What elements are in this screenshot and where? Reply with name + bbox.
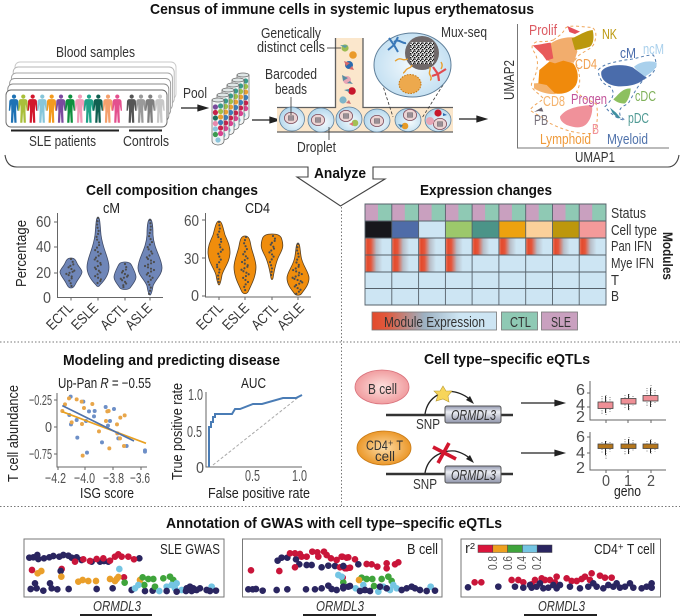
arrowhead bbox=[466, 396, 474, 404]
legend: CTL bbox=[502, 312, 538, 331]
y tick labels: 0 bbox=[43, 290, 51, 307]
label: controls: Controls bbox=[123, 134, 169, 150]
x axis label: False positive rate bbox=[208, 486, 310, 502]
label: genetically distinct cells: distinct cells bbox=[257, 40, 325, 56]
tick labels: 0.5 bbox=[245, 468, 260, 485]
label: droplet: Droplet bbox=[297, 140, 336, 156]
x labels: ACTL bbox=[98, 301, 131, 334]
panel label: SLE GWAS bbox=[160, 542, 220, 558]
status row bbox=[365, 204, 606, 221]
whiskers bbox=[606, 439, 650, 455]
label: analyze: Analyze bbox=[314, 165, 366, 182]
y tick labels bbox=[29, 393, 52, 463]
legend: SLE bbox=[542, 312, 578, 331]
jitter bbox=[602, 385, 655, 415]
variant dots bbox=[468, 573, 652, 588]
label: genetically distinct cells bbox=[257, 26, 341, 56]
violin chart: cM bbox=[36, 201, 163, 334]
scale labels: 0.4 bbox=[514, 556, 529, 570]
channel walls bbox=[277, 38, 453, 132]
chart title: CD4 bbox=[245, 201, 270, 217]
scale labels: 0.6 bbox=[500, 556, 515, 570]
UMAP labels: Lymphoid bbox=[540, 132, 591, 148]
y tick labels: 20 bbox=[36, 265, 51, 282]
axes bbox=[587, 432, 666, 473]
x labels: ESLE bbox=[69, 300, 102, 334]
base fill bbox=[365, 204, 606, 305]
data points bbox=[216, 222, 303, 294]
box plot: B cell bbox=[576, 381, 666, 426]
UMAP axes bbox=[518, 24, 669, 148]
label: barcoded beads: beads bbox=[275, 82, 307, 98]
panel: blood samples bbox=[6, 45, 176, 150]
row labels bbox=[611, 206, 657, 305]
UMAP2 axis label: UMAP2 bbox=[502, 60, 518, 100]
boxes bbox=[598, 396, 658, 408]
row labels: B bbox=[611, 289, 619, 305]
panel: pooling bbox=[181, 73, 279, 145]
zoom dashed lines bbox=[382, 83, 443, 118]
x labels: ECTL bbox=[44, 301, 77, 334]
y tick labels: 60 bbox=[36, 214, 51, 231]
y tick labels: 40 bbox=[36, 239, 51, 256]
y tick labels: −0.25 bbox=[29, 393, 52, 409]
bracket: SLE patients bbox=[11, 130, 119, 132]
DNA line bbox=[386, 414, 513, 416]
genotype tick labels: 1 bbox=[624, 473, 632, 490]
ROC curve bbox=[209, 395, 302, 467]
x labels bbox=[194, 300, 308, 334]
tick labels: 1.0 bbox=[188, 387, 203, 404]
heading: Cell type–specific eQTLs bbox=[424, 351, 590, 368]
arrow: to droplets bbox=[252, 117, 279, 123]
diagonal reference bbox=[213, 396, 300, 465]
panel label: B cell bbox=[407, 542, 438, 558]
legend: SLE: SLE bbox=[551, 315, 571, 331]
pooled tubes bbox=[212, 73, 249, 145]
bracket: controls bbox=[129, 130, 162, 132]
grid lines bbox=[365, 204, 606, 305]
heading: Cell composition changes bbox=[86, 182, 258, 199]
scale labels: 0.8 bbox=[485, 556, 500, 570]
x tick labels: −4.0 bbox=[74, 471, 95, 487]
tick labels: 6 bbox=[576, 382, 585, 399]
x labels: ASLE bbox=[123, 300, 156, 334]
panel: expression changes bbox=[365, 182, 675, 331]
label: pool: Pool bbox=[183, 86, 207, 102]
tick labels: 0 bbox=[196, 460, 204, 477]
boxes bbox=[598, 444, 658, 448]
main title: Census of immune cells in systemic lupus erythematosus bbox=[150, 1, 534, 18]
red cross bbox=[433, 443, 456, 463]
panel: microfluidic droplets bbox=[257, 25, 487, 156]
heatmap bbox=[365, 204, 606, 305]
chart title: cM bbox=[103, 201, 120, 217]
CD4 T cell label: CD4⁺ T bbox=[366, 437, 403, 453]
UMAP labels: Myeloid bbox=[607, 132, 648, 148]
frame bbox=[242, 539, 442, 597]
cell type row bbox=[365, 221, 606, 238]
antibody: blue bbox=[388, 37, 406, 52]
tick labels: 2 bbox=[576, 409, 585, 426]
regulation arc bbox=[425, 451, 472, 473]
axes bbox=[587, 381, 666, 423]
CD4 T cell oval bbox=[357, 431, 411, 465]
violins bbox=[60, 217, 162, 295]
x labels: ASLE bbox=[275, 300, 308, 334]
panel: modeling and predicting disease bbox=[6, 352, 310, 502]
data points bbox=[66, 218, 154, 294]
y tick labels: 0 bbox=[191, 288, 199, 305]
frame bbox=[24, 539, 224, 597]
tick labels: 6 bbox=[576, 429, 585, 446]
gene bar bbox=[80, 614, 152, 616]
locus plot: B cell bbox=[242, 539, 442, 616]
x tick labels: −3.6 bbox=[130, 471, 150, 487]
label: genetically distinct cells: Genetically bbox=[261, 26, 322, 42]
row labels: Cell type bbox=[611, 223, 657, 239]
modules axis label: Modules bbox=[660, 232, 675, 280]
axes bbox=[54, 393, 147, 470]
analyze bracket and arrow bbox=[5, 155, 679, 206]
tick labels bbox=[576, 382, 585, 426]
CD4 T cell label bbox=[366, 437, 403, 464]
ORMDL3 gene bbox=[445, 466, 501, 484]
genotype tick labels bbox=[602, 473, 655, 490]
gene label: ORMDL3 bbox=[538, 599, 585, 615]
SNP label: SNP bbox=[416, 417, 440, 433]
tick labels: 4 bbox=[576, 445, 585, 462]
tick labels: 0.5 bbox=[187, 424, 202, 441]
whiskers bbox=[606, 388, 650, 413]
CD4 T cell label: cell bbox=[375, 448, 395, 464]
x tick labels: −3.8 bbox=[103, 471, 124, 487]
panel label: CD4⁺ T cell bbox=[594, 542, 655, 558]
ROC curve chart bbox=[170, 376, 310, 502]
points and trend lines bbox=[62, 397, 146, 456]
UMAP clusters bbox=[530, 26, 657, 134]
colour scale bbox=[478, 545, 552, 552]
y tick labels: 30 bbox=[184, 251, 199, 268]
regulation arc bbox=[425, 392, 472, 414]
r squared legend bbox=[465, 541, 552, 570]
scatter title: Up-Pan R = −0.55 bbox=[58, 376, 151, 392]
label: barcoded beads: Barcoded bbox=[265, 67, 317, 83]
x tick labels bbox=[45, 471, 150, 487]
panel: cell composition changes bbox=[14, 182, 311, 334]
y axis label: T cell abundance bbox=[6, 385, 22, 482]
label: mux-seq: Mux-seq bbox=[441, 25, 487, 41]
variant dots, right half bbox=[342, 557, 435, 592]
UMAP labels: CD4 bbox=[575, 57, 597, 73]
legend: module expression: Module Expression bbox=[384, 315, 485, 331]
Mye IFN row bbox=[365, 255, 472, 272]
panel: UMAP bbox=[502, 23, 669, 166]
orange cell bbox=[399, 74, 421, 94]
people: controls bbox=[126, 94, 165, 123]
star bbox=[434, 386, 452, 402]
droplets bbox=[280, 107, 451, 132]
SNP label: SNP bbox=[413, 477, 437, 493]
jitter bbox=[602, 437, 655, 460]
heading: Expression changes bbox=[420, 182, 552, 199]
ORMDL3 gene: ORMDL3 bbox=[451, 468, 496, 484]
y tick labels bbox=[36, 214, 51, 307]
UMAP labels: CD8 bbox=[543, 94, 565, 110]
B cell label: B cell bbox=[368, 382, 397, 398]
barcoded bead with QR pattern bbox=[405, 36, 439, 70]
frame bbox=[461, 539, 660, 597]
arrow: CD4 result bbox=[521, 450, 564, 456]
UMAP labels: cDC bbox=[635, 89, 656, 105]
ORMDL3 gene: ORMDL3 bbox=[451, 408, 496, 424]
arrowhead bbox=[466, 455, 474, 463]
barcoded beads in droplets bbox=[284, 109, 447, 130]
y tick labels: −0.75 bbox=[29, 447, 52, 463]
channel fill bbox=[277, 38, 453, 132]
antibody: red bbox=[432, 67, 446, 81]
gene label: ORMDL3 bbox=[316, 599, 364, 615]
oligo tags bbox=[395, 59, 442, 80]
arrow: to tubes bbox=[181, 105, 207, 111]
row labels: T bbox=[611, 273, 619, 289]
panel: cell type-specific eQTLs bbox=[355, 351, 666, 500]
Pan IFN row bbox=[365, 238, 606, 255]
UMAP labels: pDC bbox=[628, 111, 649, 127]
mux-seq magnified cell bbox=[374, 33, 451, 118]
arrow: to UMAP bbox=[459, 116, 486, 122]
x axis label: ISG score bbox=[80, 486, 134, 502]
y tick labels: 60 bbox=[184, 213, 199, 230]
UMAP labels: NK bbox=[602, 27, 617, 43]
variant dots bbox=[29, 554, 216, 592]
CD4 T cell diagram bbox=[357, 431, 513, 493]
tick labels bbox=[576, 429, 585, 477]
label: barcoded beads bbox=[265, 67, 317, 115]
stacked sample cards bbox=[6, 62, 176, 127]
row labels: Status bbox=[611, 206, 646, 222]
genotype tick labels: 0 bbox=[602, 473, 610, 490]
label: droplet bbox=[297, 127, 336, 156]
axes bbox=[202, 213, 311, 300]
label: blood samples: Blood samples bbox=[56, 45, 135, 61]
x labels: ESLE bbox=[220, 300, 253, 334]
violins bbox=[208, 221, 309, 295]
UMAP labels: Progen bbox=[571, 92, 607, 108]
axes bbox=[54, 213, 163, 300]
axes bbox=[206, 392, 302, 467]
y tick labels bbox=[184, 213, 199, 305]
UMAP labels: cM bbox=[620, 46, 636, 62]
section dividers bbox=[0, 207, 680, 506]
legend: CTL: CTL bbox=[510, 315, 531, 331]
B cell oval bbox=[355, 370, 409, 404]
y axis label: Percentage bbox=[14, 220, 30, 287]
row labels: Pan IFN bbox=[611, 239, 652, 255]
gene bar bbox=[524, 614, 597, 616]
gene label: ORMDL3 bbox=[93, 599, 141, 615]
panel: annotation of GWAS bbox=[24, 515, 660, 616]
variant dots, left half bbox=[248, 552, 348, 591]
cells in channel and droplets bbox=[339, 44, 447, 129]
scatter plot bbox=[6, 376, 151, 502]
geno axis label: geno bbox=[614, 484, 641, 500]
heading: Annotation of GWAS with cell type–specific eQTLs bbox=[166, 515, 502, 532]
locus plot: SLE GWAS bbox=[24, 539, 224, 616]
UMAP labels: B bbox=[592, 122, 599, 138]
locus plot: CD4 T cell bbox=[461, 539, 660, 616]
y axis label: True positive rate bbox=[170, 383, 186, 480]
tick labels: 2 bbox=[576, 460, 585, 477]
tick labels: 1.0 bbox=[292, 468, 307, 485]
row labels: Mye IFN bbox=[611, 256, 654, 272]
r squared label: r² bbox=[465, 541, 475, 557]
box plot: CD4 T cell bbox=[576, 429, 666, 500]
UMAP labels: ncM bbox=[643, 42, 664, 58]
B cell diagram bbox=[355, 370, 513, 433]
y tick labels: 0 bbox=[45, 420, 52, 436]
UMAP labels: PB bbox=[534, 113, 548, 129]
x labels: ACTL bbox=[249, 301, 282, 334]
heading: Modeling and predicting disease bbox=[63, 352, 280, 369]
UMAP1 axis label: UMAP1 bbox=[575, 150, 615, 166]
x tick labels: −4.2 bbox=[45, 471, 66, 487]
scale labels bbox=[485, 556, 544, 570]
arrow: B cell result bbox=[521, 400, 564, 406]
magnified droplet bbox=[374, 33, 451, 97]
genotype tick labels: 2 bbox=[647, 473, 655, 490]
chart title: AUC bbox=[241, 376, 266, 392]
people: SLE patients bbox=[9, 94, 122, 123]
gene bar bbox=[303, 614, 376, 616]
ORMDL3 gene bbox=[445, 406, 501, 424]
x labels bbox=[44, 300, 156, 334]
tick labels: 4 bbox=[576, 397, 585, 414]
x labels: ECTL bbox=[194, 301, 227, 334]
DNA line bbox=[386, 473, 513, 475]
label: SLE patients: SLE patients bbox=[29, 134, 96, 150]
tick labels bbox=[187, 387, 307, 485]
scale labels: 0.2 bbox=[529, 556, 544, 570]
UMAP labels: Prolif bbox=[529, 23, 558, 39]
violin chart: CD4 bbox=[184, 201, 311, 334]
UMAP labels bbox=[529, 23, 664, 148]
